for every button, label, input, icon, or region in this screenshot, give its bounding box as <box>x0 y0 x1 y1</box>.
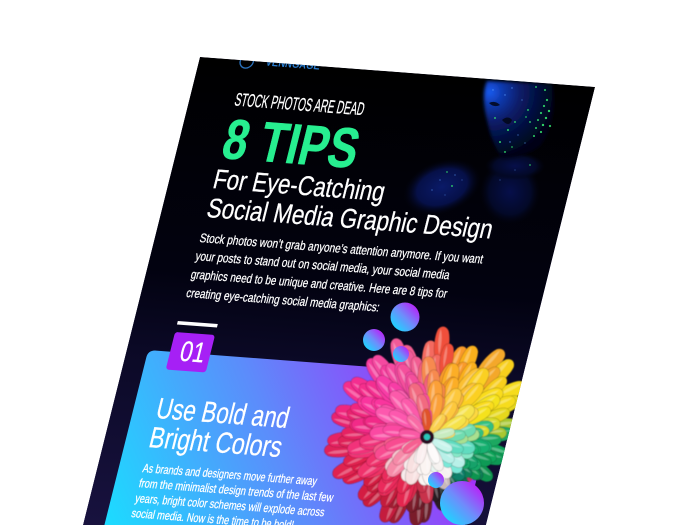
photo: glitter face <box>396 81 554 225</box>
page background <box>83 57 595 525</box>
intro paragraph: Stock photos won’t grab anyone’s attention anymore. If you want <box>198 230 485 266</box>
intro paragraph: graphics need to be unique and creative. Here are 8 tips for <box>189 267 450 301</box>
intro paragraph <box>186 233 484 312</box>
tip body text: As brands and designers move further away <box>141 461 319 488</box>
bubble: top <box>390 302 420 332</box>
tip body text: years, bright color schemes will explode across <box>134 491 326 519</box>
skewed layout <box>104 60 492 525</box>
title: 8 tips: 8 TIPS <box>216 108 366 181</box>
tip heading: Use Bold and <box>153 392 293 435</box>
subtitle: For Eye-Catching <box>210 163 389 207</box>
tip heading <box>149 398 290 457</box>
page background gradient <box>83 57 595 525</box>
bubble: on flower top <box>393 346 409 362</box>
infographic page <box>83 53 595 525</box>
intro paragraph: creating eye-catching social media graphics: <box>185 285 381 315</box>
number badge 01 <box>166 332 215 373</box>
subtitle: Social Media Graphic Design <box>204 192 497 244</box>
tip body text <box>130 461 339 525</box>
flower photo <box>324 326 529 525</box>
subtitle <box>207 169 492 243</box>
panel: tip 1 <box>104 350 502 525</box>
logo: Venngage <box>239 60 320 70</box>
bubble: large <box>440 481 484 525</box>
number badge 01: 01 <box>177 336 209 369</box>
tip heading: Bright Colors <box>146 421 286 464</box>
logo: Venngage: VENNGAGE <box>264 57 322 73</box>
kicker: STOCK PHOTOS ARE DEAD <box>233 89 367 119</box>
tip body text: from the minimalist design trends of the last few <box>138 476 335 505</box>
intro paragraph: your posts to stand out on social media, your social media <box>194 248 452 282</box>
number marker bar <box>177 321 218 328</box>
bubble: left <box>363 329 385 351</box>
bubble: on flower bottom <box>428 472 444 488</box>
